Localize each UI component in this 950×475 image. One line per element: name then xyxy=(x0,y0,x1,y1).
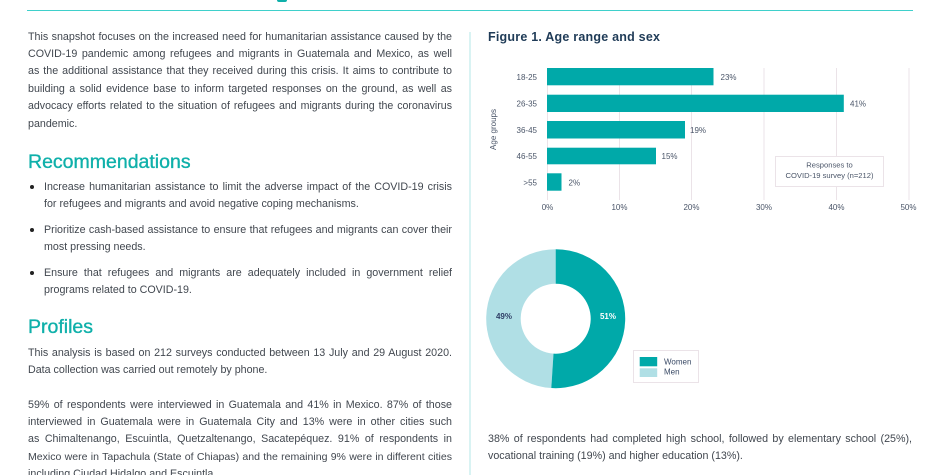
education paragraph: vocational training (19%) and higher education (13%). xyxy=(488,450,743,462)
bar: 36-45 xyxy=(517,121,706,138)
intro paragraph: pandemic. xyxy=(28,118,77,130)
recommendation 1: Increase humanitarian assistance to limit the adverse impact of the COVID-19 crisis xyxy=(44,180,452,192)
profiles paragraph 2: 59% of respondents were interviewed in Guatemala and 41% in Mexico. 87% of those xyxy=(28,398,452,410)
bar: 46-55 xyxy=(517,148,678,164)
label: men share: 49% xyxy=(496,312,512,321)
note: survey responses: Responses to xyxy=(806,160,853,170)
x axis labels xyxy=(542,203,917,212)
bar: >55 xyxy=(523,173,580,191)
recommendation 2 xyxy=(30,224,452,253)
heading: Profiles: Profiles xyxy=(28,316,93,338)
intro paragraph: COVID-19 pandemic among refugees and migrants in Guatemala and Mexico, as well xyxy=(28,48,452,60)
bar: 36-45: 19% xyxy=(690,126,706,135)
x axis labels: 50% xyxy=(900,203,917,212)
recommendation 1: for refugees and migrants and avoid negative coping mechanisms. xyxy=(44,198,359,210)
figure title: Figure 1. Age range and sex xyxy=(488,30,660,44)
legend: Women xyxy=(664,358,691,366)
profiles paragraph 2: as Chimaltenango, Escuintla, Quetzaltenango, Sacatepéquez. 91% of respondents in xyxy=(28,433,452,445)
note: survey responses: COVID-19 survey (n=212) xyxy=(786,171,874,180)
intro paragraph: This snapshot focuses on the increased need for humanitarian assistance caused by the xyxy=(28,30,452,42)
recommendation 3 xyxy=(30,266,452,296)
profiles paragraph 2: Mexico were in Tapachula (State of Chiapas) and the remaining 9% were in different cities xyxy=(28,451,452,463)
x axis labels: 30% xyxy=(756,203,772,212)
profiles paragraph 2 xyxy=(28,398,452,475)
legend: Men xyxy=(664,368,680,376)
bar: 36-45: 36-45 xyxy=(517,126,538,135)
recommendation 1 xyxy=(30,180,452,210)
slice: men 49% xyxy=(486,249,556,388)
intro paragraph: as the additional assistance that they received during this crisis. It aims to contribute to xyxy=(28,65,452,77)
bar: >55: 2% xyxy=(568,178,580,188)
x axis labels: 0% xyxy=(542,203,553,212)
label: women share: 51% xyxy=(600,312,616,321)
education paragraph: 38% of respondents had completed high school, followed by elementary school (25%), xyxy=(488,432,912,444)
bar: 46-55: 46-55 xyxy=(517,152,538,161)
bar: 26-35: 41% xyxy=(850,100,866,108)
column divider xyxy=(469,32,471,475)
clipped title descender xyxy=(277,0,287,2)
legend xyxy=(634,350,698,382)
note: survey responses xyxy=(776,156,884,186)
recommendation 2: Prioritize cash-based assistance to ensure that refugees and migrants can cover their xyxy=(44,224,452,236)
slice: women 51% xyxy=(551,249,625,388)
bar: 18-25: 18-25 xyxy=(517,73,538,82)
x axis labels: 10% xyxy=(611,203,628,212)
recommendation 2: most pressing needs. xyxy=(44,241,146,253)
intro paragraph: advocacy efforts related to the situation of refugees and migrants during the coronavirus xyxy=(28,100,452,112)
axis title: age groups: Age groups xyxy=(489,109,498,150)
header rule xyxy=(27,10,913,11)
heading: Recommendations: Recommendations xyxy=(28,150,191,172)
profiles paragraph 2: interviewed in Guatemala were in Guatemala City and 13% were in other cities such xyxy=(28,416,452,428)
donut chart: sex xyxy=(486,249,699,388)
bar: 18-25 xyxy=(517,68,737,85)
bar: 26-35 xyxy=(517,95,866,112)
profiles paragraph 1: This analysis is based on 212 surveys conducted between 13 July and 29 August 2020. xyxy=(28,346,452,358)
recommendation 3: Ensure that refugees and migrants are adequately included in government relief xyxy=(44,266,452,278)
intro paragraph: building a solid evidence base to inform targeted responses on the ground, as well as xyxy=(28,83,452,95)
intro paragraph xyxy=(28,30,452,130)
x axis labels: 20% xyxy=(683,203,700,212)
recommendations list xyxy=(30,180,452,296)
recommendation 3: programs related to COVID-19. xyxy=(44,284,192,296)
profiles paragraph 1 xyxy=(28,346,452,376)
bar: 26-35: 26-35 xyxy=(517,100,538,108)
bar: 18-25: 23% xyxy=(720,73,737,82)
bar chart: age groups xyxy=(489,68,917,212)
bar: 46-55: 15% xyxy=(662,152,678,161)
profiles paragraph 1: Data collection was carried out remotely by phone. xyxy=(28,364,267,376)
education paragraph xyxy=(488,432,912,462)
x axis labels: 40% xyxy=(828,203,845,212)
bar: >55: >55 xyxy=(523,178,538,188)
